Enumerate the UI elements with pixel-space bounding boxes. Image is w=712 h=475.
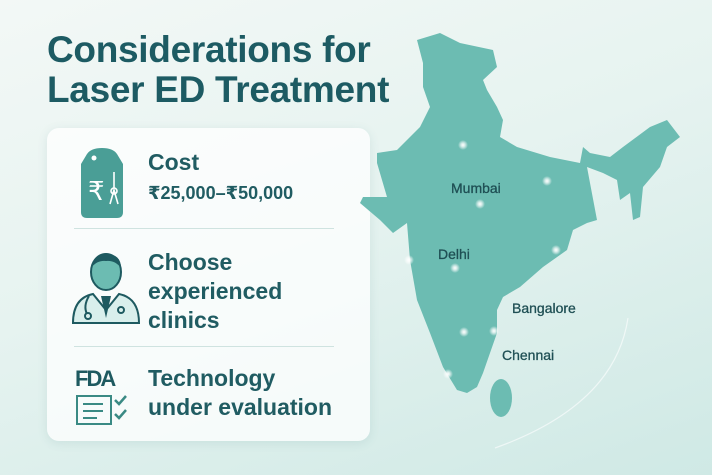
label: Mumbai: Mumbai — [451, 180, 501, 196]
title: Considerations for — [47, 29, 371, 70]
label: Chennai: Chennai — [502, 347, 554, 363]
icon: FDA checklist: FDA — [75, 366, 116, 391]
city dots — [404, 140, 561, 379]
title: Laser ED Treatment — [47, 69, 389, 110]
label: Delhi: Delhi — [438, 246, 470, 262]
row: FDA — [75, 365, 332, 425]
panel: considerations card — [47, 128, 370, 441]
title — [47, 29, 389, 110]
icon: FDA checklist — [75, 366, 127, 425]
icon: price tag with rupee: ₹ — [88, 177, 105, 207]
heading: technology under evaluation — [148, 365, 332, 420]
row: clinics — [72, 249, 282, 333]
heading: technology under evaluation: under evaluation — [148, 394, 332, 420]
heading: choose experienced clinics: clinics — [148, 307, 220, 333]
heading: choose experienced clinics: Choose — [148, 249, 232, 275]
icon: price tag with rupee — [81, 148, 123, 218]
heading: technology under evaluation: Technology — [148, 365, 275, 391]
icon: doctor — [72, 253, 140, 324]
heading: cost: Cost — [148, 149, 199, 175]
heading: choose experienced clinics — [148, 249, 282, 333]
label: Bangalore: Bangalore — [512, 300, 576, 316]
heading: choose experienced clinics: experienced — [148, 278, 282, 304]
text: cost range: ₹25,000–₹50,000 — [148, 183, 293, 203]
row: cost — [81, 148, 293, 218]
